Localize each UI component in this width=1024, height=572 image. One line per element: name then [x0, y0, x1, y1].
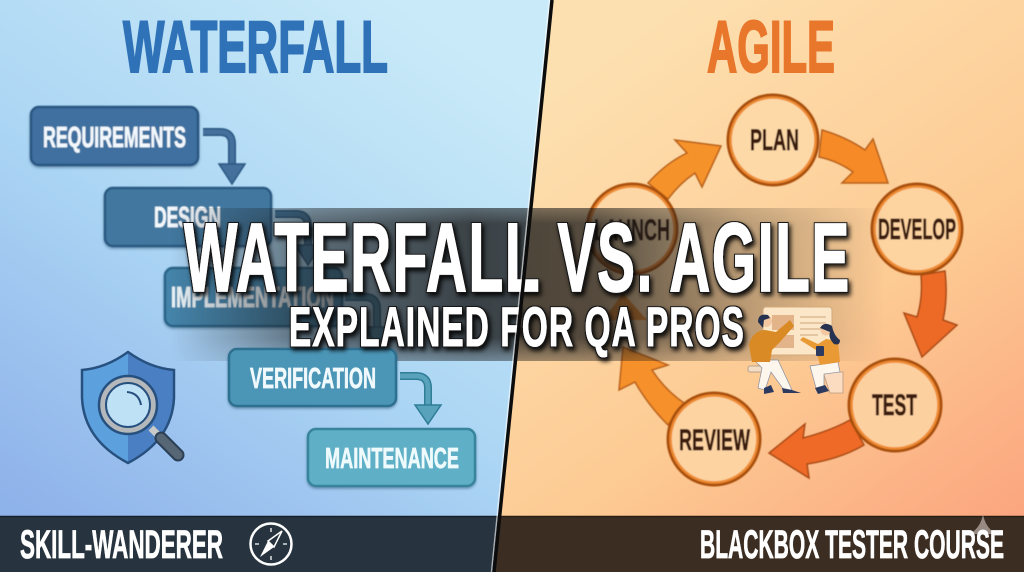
arrow: verification to maintenance	[400, 376, 441, 424]
arrow: plan to develop	[819, 130, 888, 183]
arrow: review to launch	[619, 347, 684, 425]
title band	[170, 208, 885, 361]
heading: AGILE: AGILE	[707, 7, 835, 88]
board	[763, 307, 832, 355]
arrow: develop to test	[904, 271, 957, 357]
icon: shield with magnifier	[82, 352, 178, 463]
footer: left bar	[0, 516, 501, 572]
node: launch: LAUNCH	[594, 214, 670, 247]
illustration: two people at a board	[748, 307, 843, 394]
node: test	[849, 359, 941, 451]
node: launch	[587, 184, 677, 274]
node: review: REVIEW	[679, 424, 750, 457]
arrowhead remnant behind subtitle	[603, 293, 647, 320]
step: verification	[229, 349, 396, 406]
center divider	[492, 0, 552, 572]
step: requirements: REQUIREMENTS	[43, 122, 186, 154]
step: maintenance: MAINTENANCE	[325, 443, 459, 475]
panel: agile background	[494, 0, 1024, 572]
step: implementation: IMPLEMENTATION	[171, 282, 334, 314]
icon: compass	[250, 524, 292, 564]
arrow: design to implementation	[275, 214, 321, 265]
step: verification: VERIFICATION	[250, 363, 376, 395]
node: develop: DEVELOP	[878, 214, 956, 246]
person left	[748, 315, 801, 394]
arrow: requirements to design	[203, 132, 245, 184]
arrow: implementation to verification	[345, 297, 390, 346]
step: requirements	[31, 107, 198, 165]
node: review	[668, 393, 760, 485]
node: plan	[728, 95, 818, 185]
person right	[800, 324, 843, 394]
arrow: launch to plan	[648, 140, 721, 199]
heading: WATERFALL: WATERFALL	[123, 7, 388, 88]
step: design: DESIGN	[154, 202, 221, 234]
arrow: test to review	[769, 420, 864, 478]
footer: right bar	[495, 514, 1024, 572]
panel: agile cycle	[587, 95, 962, 485]
watermark sparkle	[970, 514, 996, 534]
node: test: TEST	[872, 389, 917, 422]
waterfall flow	[31, 107, 390, 346]
panel: waterfall background	[0, 0, 552, 572]
step: implementation	[165, 268, 342, 326]
node: plan: PLAN	[750, 124, 799, 157]
step: design	[105, 188, 271, 246]
footer text: SKILL-WANDERER: SKILL-WANDERER	[20, 523, 223, 567]
node: develop	[872, 184, 962, 274]
step: maintenance	[308, 429, 475, 486]
